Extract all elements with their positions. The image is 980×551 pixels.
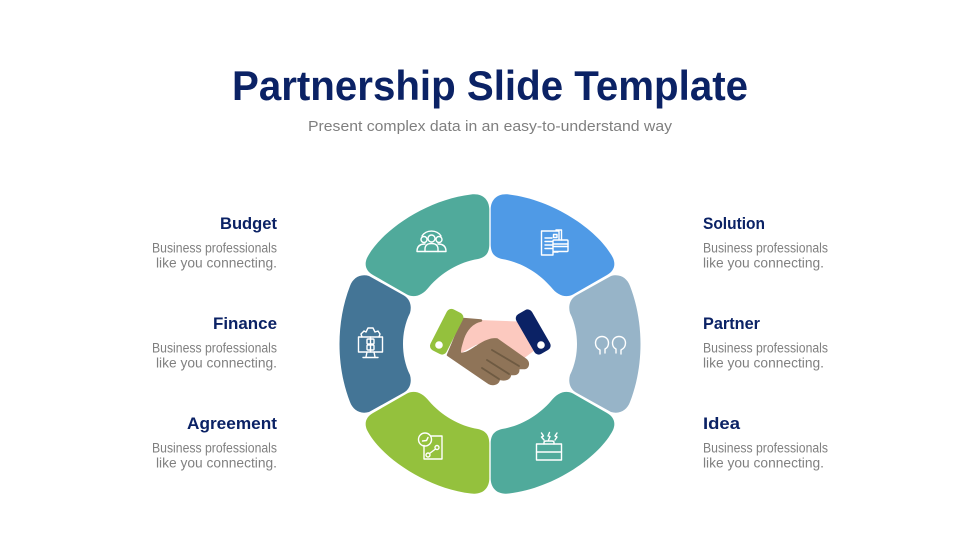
label: Agreement: Business professionals	[152, 440, 277, 456]
segment: Finance	[340, 275, 411, 413]
label: Agreement: like you connecting.	[156, 456, 277, 470]
icon: document and card	[542, 230, 568, 255]
label: Solution	[703, 214, 828, 270]
label: Budget: like you connecting.	[156, 256, 277, 270]
icon: team	[417, 231, 446, 252]
label: Agreement: Agreement	[187, 414, 277, 433]
icon: handshake	[428, 307, 552, 384]
green cuff hole	[435, 341, 443, 349]
navy cuff	[514, 308, 552, 356]
brown hand	[448, 319, 528, 384]
icon: clock and document	[418, 433, 442, 459]
label: Idea: Business professionals	[703, 440, 828, 456]
label: Idea: like you connecting.	[703, 456, 824, 470]
label: Partner	[703, 314, 828, 370]
label: Solution: like you connecting.	[703, 256, 824, 270]
label: Budget: Budget	[220, 214, 277, 233]
pink hand	[459, 320, 535, 359]
segment: Agreement	[366, 392, 489, 494]
icon: briefcase with bolts	[536, 432, 562, 460]
label: Finance: like you connecting.	[156, 356, 277, 370]
segment: Budget	[366, 194, 489, 296]
segment: Partner	[569, 275, 640, 413]
label: Partner: like you connecting.	[703, 356, 824, 370]
navy cuff hole	[537, 341, 545, 349]
subtitle: Present complex data in an easy-to-understand way	[308, 118, 673, 135]
label: Finance: Finance	[213, 314, 277, 333]
label: Solution: Business professionals	[703, 240, 828, 256]
title: Partnership Slide Template	[232, 62, 748, 109]
segment: Solution	[491, 194, 614, 296]
label: Partner: Partner	[703, 314, 760, 333]
label: Agreement	[152, 414, 277, 470]
green cuff	[428, 307, 465, 356]
finger lines	[482, 350, 519, 379]
label: Idea	[703, 414, 828, 470]
label: Solution: Solution	[703, 214, 765, 233]
label: Budget: Business professionals	[152, 240, 277, 256]
icon: two heads	[596, 336, 626, 354]
label: Finance: Business professionals	[152, 340, 277, 356]
segment: Idea	[491, 392, 614, 494]
label: Finance	[152, 314, 277, 370]
label: Partner: Business professionals	[703, 340, 828, 356]
label: Budget	[152, 214, 277, 270]
label: Idea: Idea	[703, 414, 741, 433]
icon: monitor with gear	[358, 328, 382, 358]
